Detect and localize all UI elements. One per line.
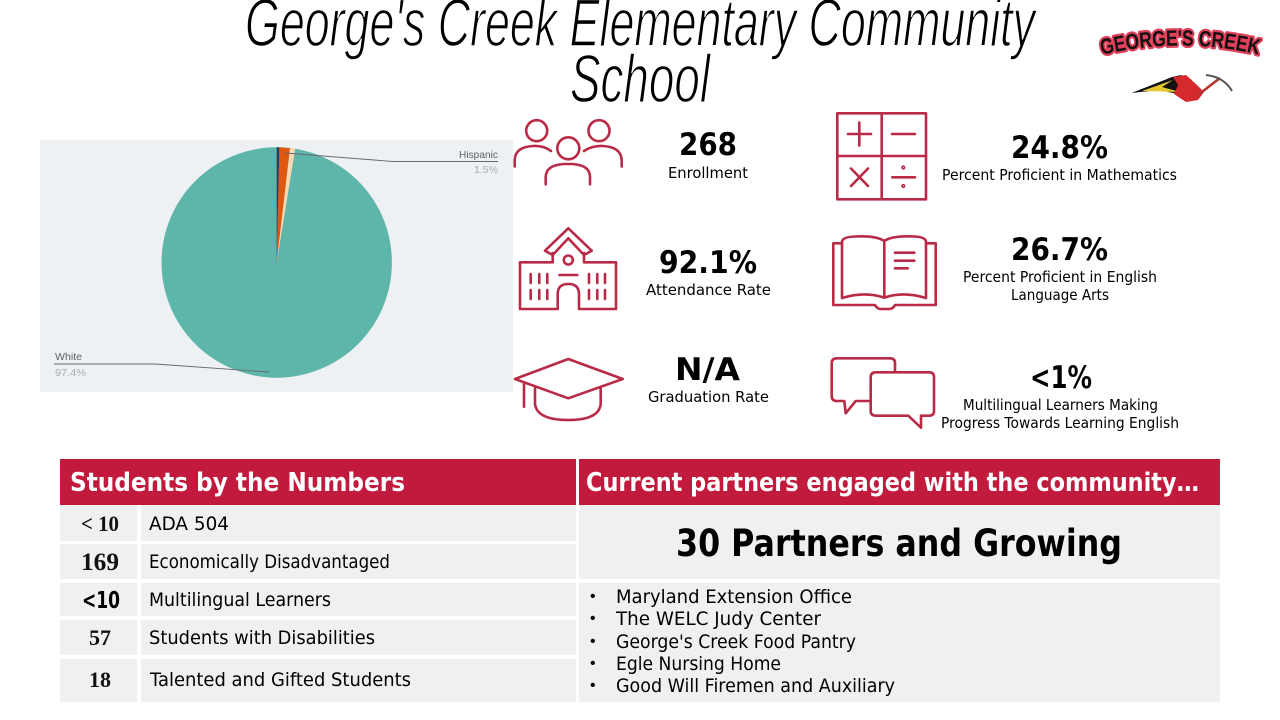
icon: open book bbox=[833, 236, 936, 309]
row: talented and gifted bbox=[60, 659, 576, 702]
stat: multilingual learners progress: Progress Towards Learning English bbox=[941, 414, 1179, 432]
stat: English language arts proficiency: Language Arts bbox=[1011, 286, 1109, 304]
list: partner names: • bbox=[590, 655, 596, 672]
pie slice: White bbox=[162, 147, 392, 378]
stat: multilingual learners progress: Multilingual Learners Making bbox=[963, 396, 1158, 414]
callout: White: White bbox=[55, 351, 82, 363]
stat: graduation rate: N/A bbox=[675, 352, 740, 388]
row: multilingual learners: <10 bbox=[82, 588, 120, 614]
logo: George's Creek mascot bbox=[1098, 28, 1263, 102]
callout: Hispanic bbox=[285, 149, 498, 176]
row: ADA 504: ADA 504 bbox=[149, 513, 229, 535]
row: talented and gifted: 18 bbox=[89, 667, 111, 692]
stat: mathematics proficiency: 24.8% bbox=[1011, 130, 1108, 166]
list: partner names: • bbox=[590, 610, 596, 627]
row: students with disabilities: 57 bbox=[89, 625, 111, 650]
row: economically disadvantaged: 169 bbox=[81, 549, 119, 576]
callout: 30 partners and growing: 30 Partners and Growing bbox=[676, 522, 1122, 565]
row: ADA 504 bbox=[60, 505, 576, 541]
list: partner names: Egle Nursing Home bbox=[616, 653, 781, 675]
row: economically disadvantaged bbox=[60, 544, 576, 579]
icon: speech bubbles bbox=[832, 358, 934, 428]
callout: 30 partners and growing bbox=[579, 505, 1220, 579]
stat: English language arts proficiency: 26.7% bbox=[1011, 232, 1108, 268]
icon: school building bbox=[520, 228, 616, 309]
list: partner names: George's Creek Food Pantry bbox=[616, 631, 856, 653]
stat: multilingual learners progress: <1% bbox=[1030, 360, 1092, 396]
list: partner names: The WELC Judy Center bbox=[615, 608, 821, 630]
icon: people bbox=[515, 120, 622, 184]
heading: students by the numbers: Students by the Numbers bbox=[70, 468, 405, 498]
callout: White: 97.4% bbox=[55, 367, 86, 379]
list: partner names: • bbox=[590, 633, 596, 650]
row: talented and gifted: Talented and Gifted Students bbox=[149, 669, 411, 691]
stat: attendance rate bbox=[646, 245, 771, 299]
stat: attendance rate: 92.1% bbox=[659, 245, 757, 281]
heading: current partners: Current partners engaged with the community… bbox=[586, 468, 1199, 498]
heading: current partners bbox=[579, 459, 1220, 505]
logo: George's Creek mascot: GEORGE'S CREEK bbox=[1098, 28, 1263, 57]
panel: pie chart of student demographics bbox=[40, 140, 513, 392]
panel: students by the numbers bbox=[60, 459, 576, 702]
list: partner names: Maryland Extension Office bbox=[616, 586, 852, 608]
list: partner names: Good Will Firemen and Auxiliary bbox=[616, 675, 895, 697]
stat: mathematics proficiency bbox=[942, 130, 1177, 184]
row: students with disabilities bbox=[60, 620, 576, 655]
stat: attendance rate: Attendance Rate bbox=[646, 281, 771, 299]
stat: multilingual learners progress bbox=[941, 360, 1179, 432]
row: multilingual learners bbox=[60, 583, 576, 616]
stat: mathematics proficiency: Percent Proficient in Mathematics bbox=[942, 166, 1177, 184]
row: economically disadvantaged: Economically Disadvantaged bbox=[149, 551, 390, 573]
icon: graduation cap bbox=[515, 359, 623, 420]
list: partner names: • bbox=[590, 588, 596, 605]
callout: Hispanic: Hispanic bbox=[459, 149, 498, 161]
stat: enrollment: Enrollment bbox=[668, 164, 748, 182]
row: students with disabilities: Students with Disabilities bbox=[149, 627, 375, 649]
list: partner names: • bbox=[590, 677, 596, 694]
list: partner names bbox=[579, 583, 1220, 702]
title bbox=[245, 0, 1038, 117]
row: ADA 504: < 10 bbox=[81, 511, 119, 536]
heading: students by the numbers bbox=[60, 459, 576, 505]
stat: English language arts proficiency bbox=[963, 232, 1157, 304]
row: multilingual learners: Multilingual Learners bbox=[149, 589, 331, 611]
panel: community partners bbox=[579, 459, 1220, 702]
title: School bbox=[570, 41, 711, 117]
stat: enrollment bbox=[668, 127, 748, 182]
pie slice: small slices bbox=[277, 147, 295, 262]
stat: graduation rate: Graduation Rate bbox=[648, 388, 769, 406]
stat: graduation rate bbox=[648, 352, 769, 406]
stat: English language arts proficiency: Percent Proficient in English bbox=[963, 268, 1157, 286]
callout: Hispanic: 1.5% bbox=[474, 164, 498, 176]
callout: White bbox=[54, 351, 269, 379]
stat: enrollment: 268 bbox=[679, 127, 737, 163]
icon: calculator bbox=[837, 113, 926, 199]
